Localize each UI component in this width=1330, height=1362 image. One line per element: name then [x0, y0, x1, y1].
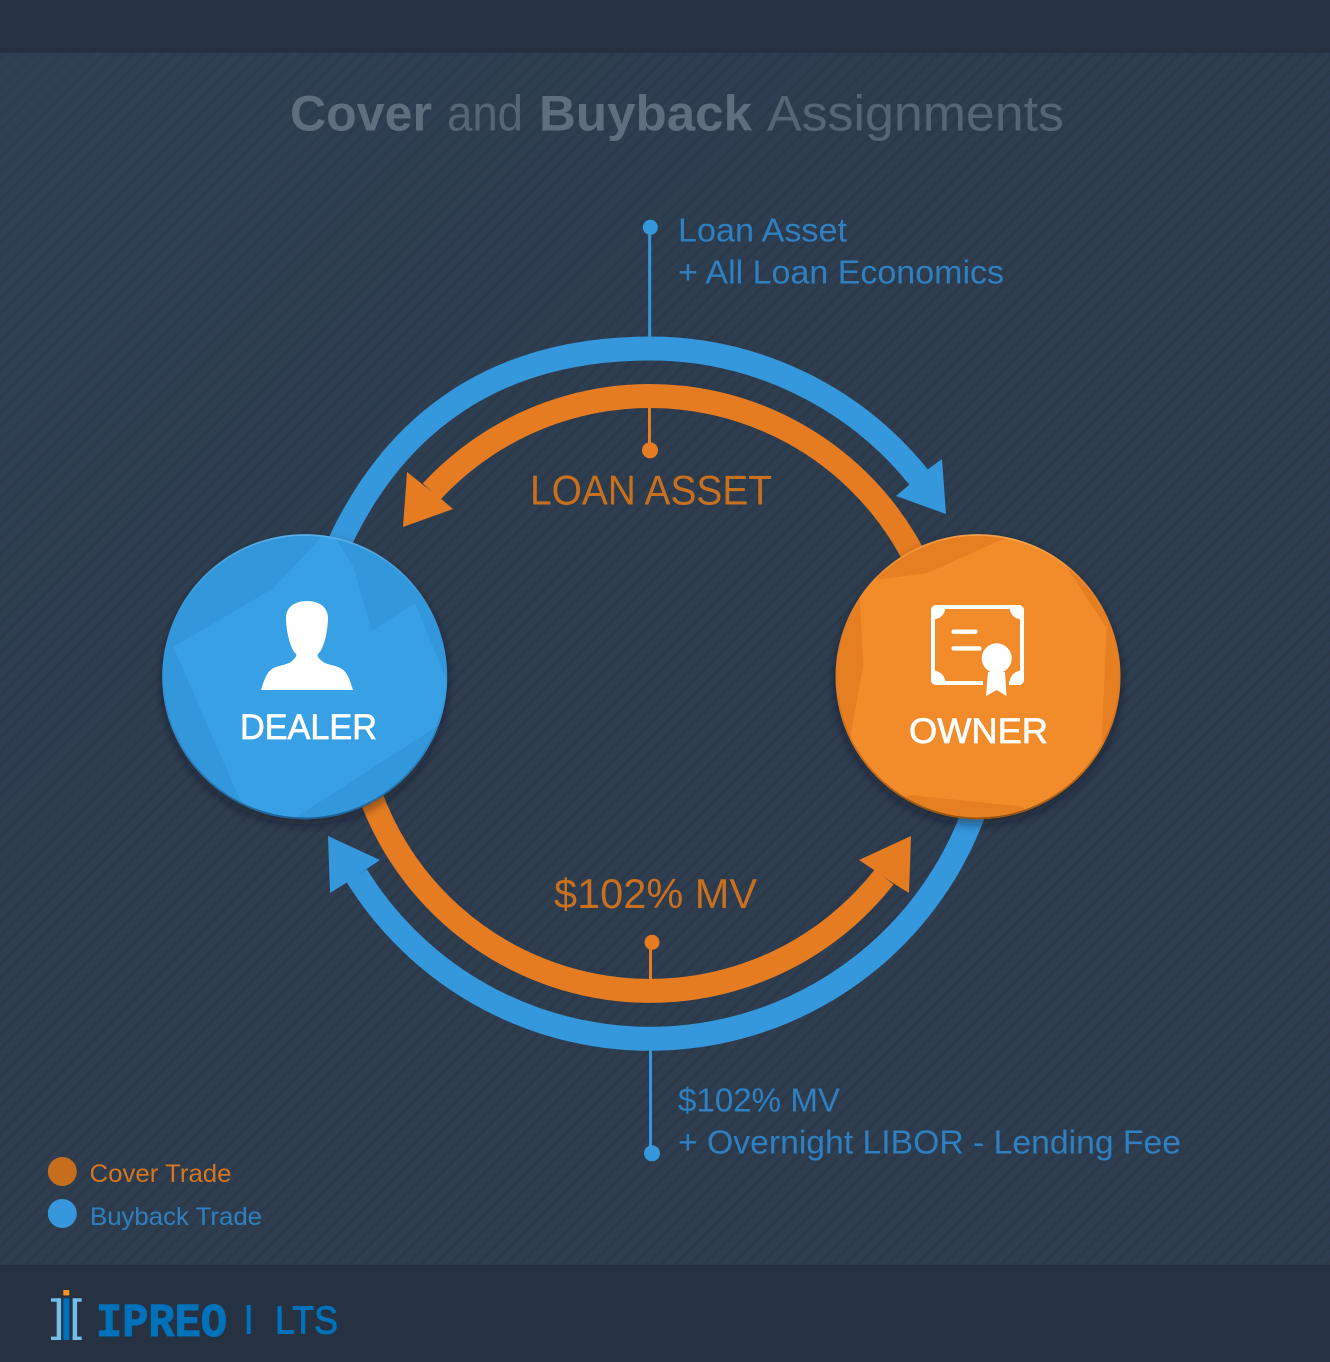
title	[290, 86, 1064, 142]
title: Cover	[290, 86, 432, 142]
icon: certificate	[931, 605, 1024, 696]
logo product name: LTS	[275, 1300, 338, 1342]
callout connector: 102 percent MV orange	[644, 935, 660, 984]
callout text: MV plus overnight LIBOR: + Overnight LIBOR - Lending Fee	[678, 1124, 1181, 1162]
arrow: top orange arc to dealer	[403, 396, 932, 600]
top band	[0, 0, 1330, 53]
logo: Ipreo LTS	[51, 1290, 338, 1351]
legend item: buyback trade	[48, 1199, 262, 1231]
logo wordmark: IPREO	[96, 1298, 227, 1351]
callout text: MV plus overnight LIBOR: $102% MV	[678, 1082, 841, 1120]
label: dealer: DEALER	[240, 708, 377, 747]
node: owner	[825, 525, 1135, 830]
callout connector: loan asset top	[643, 220, 658, 341]
title: Buyback	[539, 86, 752, 142]
callout text: MV plus overnight LIBOR	[678, 1082, 1181, 1162]
title: and	[447, 86, 523, 142]
arrow: bottom blue arc to dealer	[328, 800, 978, 1039]
legend item: cover trade: Cover Trade	[90, 1160, 232, 1188]
callout text: loan asset and economics: Loan Asset	[678, 212, 848, 250]
callout connector: loan asset orange	[642, 405, 658, 458]
icon: logo mark	[51, 1290, 82, 1340]
callout text: loan asset and economics: + All Loan Economics	[678, 254, 1004, 292]
node: dealer	[162, 525, 460, 830]
label: loan asset: LOAN ASSET	[530, 466, 772, 514]
label: owner: OWNER	[909, 712, 1048, 751]
arrow: top blue arc to owner	[332, 348, 946, 560]
legend item: buyback trade: Buyback Trade	[90, 1203, 262, 1231]
callout connector: overnight LIBOR	[644, 1046, 660, 1161]
label: 102 percent MV orange: $102% MV	[554, 870, 757, 917]
legend	[48, 1157, 262, 1231]
icon: person	[261, 601, 353, 690]
callout text: loan asset and economics	[678, 212, 1004, 292]
legend item: cover trade	[48, 1157, 231, 1188]
title: Assignments	[767, 86, 1064, 142]
arrow: bottom orange arc to owner	[365, 780, 911, 991]
footer band	[0, 1265, 1330, 1362]
